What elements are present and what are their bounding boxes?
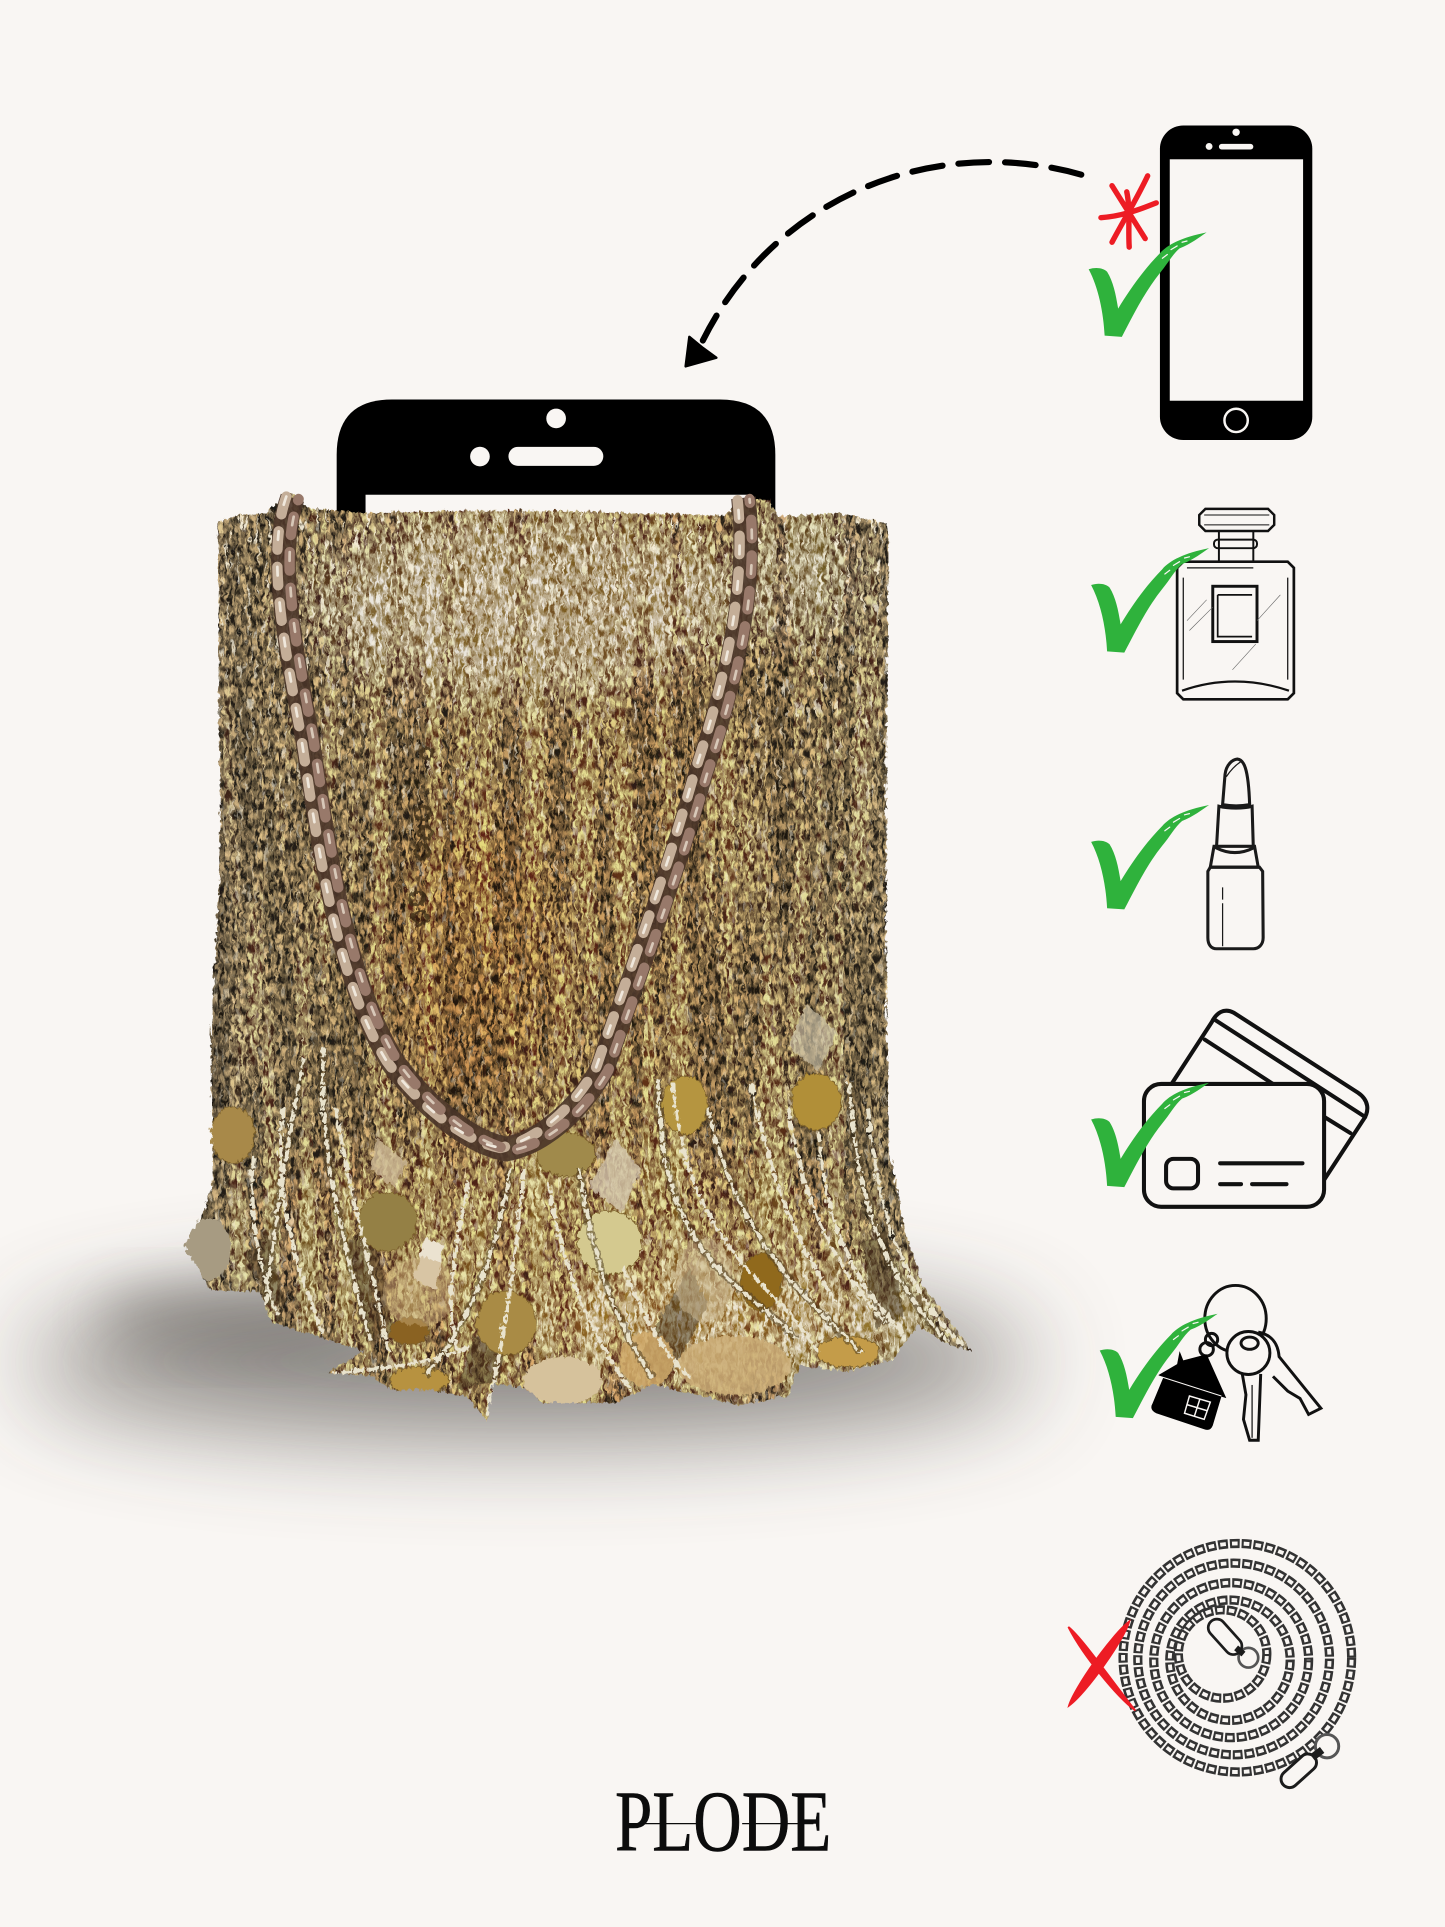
icon: smartphone: [1160, 125, 1312, 440]
green check: perfume: [1091, 548, 1209, 653]
inner clasp: [1205, 1616, 1258, 1668]
large phone peeking out of bag: [337, 400, 775, 532]
icon: house keys: [1151, 1285, 1321, 1440]
outer clasp: [1278, 1735, 1339, 1791]
logo: PLODE: PLODE: [615, 1773, 831, 1870]
beaded gold bag: [172, 486, 983, 1432]
icon: red asterisk: [1101, 176, 1156, 247]
icon: perfume bottle: [1177, 509, 1294, 699]
green check: lipstick: [1091, 805, 1209, 909]
gold discs: [209, 1072, 877, 1392]
icon: coiled metal chain: [1123, 1543, 1352, 1791]
floor shadow: [25, 1285, 1032, 1433]
beaded fringe strands: [264, 1045, 946, 1376]
green check: phone: [1089, 232, 1207, 337]
sequin column: [409, 747, 431, 922]
crystals: [183, 1002, 836, 1402]
icon: red cross: [1068, 1621, 1135, 1711]
shadow gaps between fringe: [246, 1217, 903, 1389]
bag chain strap: [277, 497, 752, 1150]
dashed arrow from phone to bag: [686, 162, 1081, 366]
icon: lipstick: [1208, 759, 1263, 949]
green check: cards: [1091, 1083, 1209, 1187]
icon: bank cards: [1144, 1011, 1367, 1207]
green check: keys: [1100, 1314, 1218, 1418]
